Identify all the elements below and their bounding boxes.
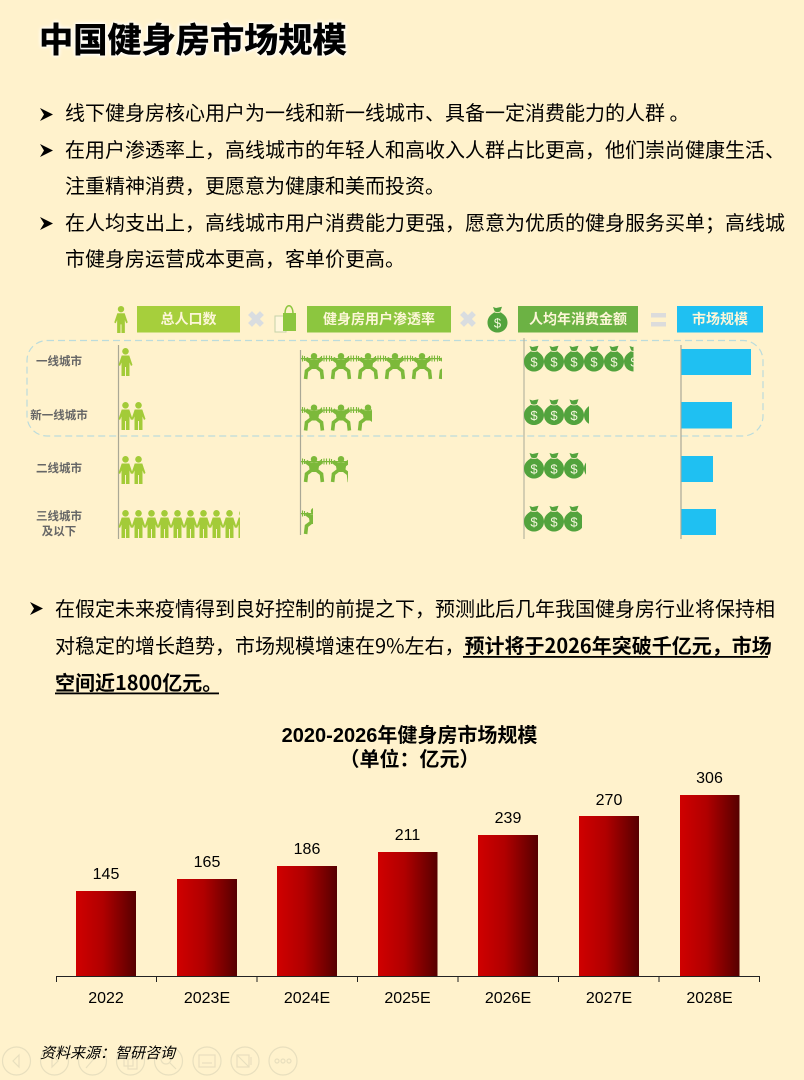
bars <box>76 795 740 976</box>
title: 中国健身房市场规模 <box>39 12 347 62</box>
value labels: 306 <box>696 770 723 787</box>
value labels: 239 <box>495 810 521 827</box>
value labels: 270 <box>596 792 622 809</box>
chart title: 2020-2026年健身房市场规模 <box>282 723 537 747</box>
forecast text: 对稳定的增长趋势，市场规模增速在9%左右，预计将于2026年突破千亿元，市场 <box>55 630 772 659</box>
penetration column <box>300 350 442 535</box>
forecast text: 在假定未来疫情得到良好控制的前提之下，预测此后几年我国健身房行业将保持相 <box>55 593 775 622</box>
city tier labels: 三线城市 <box>36 508 82 524</box>
icon: multiply: ✖ <box>247 307 265 332</box>
x axis <box>56 976 760 982</box>
header: gym user penetration: 健身房用户渗透率 <box>323 309 435 329</box>
header: annual spend per person <box>518 306 638 332</box>
header: gym user penetration <box>307 306 451 332</box>
highlight frame: tier one and new tier one cities <box>27 340 763 436</box>
city tier labels: 及以下 <box>42 523 76 539</box>
source note: 资料来源：智研咨询 <box>40 1042 177 1063</box>
icon: multiply: ✖ <box>459 307 477 332</box>
bullet 2 <box>40 134 785 199</box>
market size formula diagram <box>27 306 763 539</box>
value labels <box>93 770 723 883</box>
axis labels: 2025E <box>384 990 431 1007</box>
spend column <box>524 338 644 539</box>
bullet 2: 注重精神消费，更愿意为健康和美而投资。 <box>65 170 445 199</box>
chart title: （单位：亿元） <box>340 747 480 771</box>
forecast text <box>30 593 775 696</box>
forecast text: 空间近1800亿元。 <box>55 667 222 696</box>
header: market size: 市场规模 <box>692 309 748 329</box>
market size column <box>681 345 751 539</box>
header: total population: 总人口数 <box>160 309 216 329</box>
city tier labels: 一线城市 <box>36 353 82 369</box>
axis labels: 2022 <box>88 990 124 1007</box>
axis labels <box>88 990 733 1007</box>
value labels: 165 <box>194 854 220 871</box>
slideshow navigation controls <box>2 1047 297 1075</box>
bullet 3: 市健身房运营成本更高，客单价更高。 <box>65 243 405 272</box>
icon: equals <box>651 313 666 326</box>
value labels: 186 <box>294 841 320 858</box>
axis labels: 2024E <box>284 990 330 1007</box>
city tier labels <box>30 353 88 539</box>
header: total population <box>137 306 240 332</box>
bar chart: market size 2020-2026 <box>56 723 760 1007</box>
chart title <box>282 723 537 771</box>
icon: money bag <box>488 307 508 332</box>
header: annual spend per person: 人均年消费金额 <box>529 309 627 329</box>
header: market size <box>677 306 763 332</box>
bullet 3: 在人均支出上，高线城市用户消费能力更强，愿意为优质的健身服务买单；高线城 <box>65 207 785 236</box>
bullet 3 <box>40 207 785 272</box>
bullet list: core users <box>40 97 785 272</box>
value labels: 211 <box>395 827 420 844</box>
axis labels: 2028E <box>686 990 733 1007</box>
city tier labels: 新一线城市 <box>30 407 88 423</box>
city tier labels: 二线城市 <box>36 460 82 476</box>
bullet 2: 在用户渗透率上，高线城市的年轻人和高收入人群占比更高，他们崇尚健康生活、 <box>65 134 785 163</box>
axis labels: 2023E <box>184 990 230 1007</box>
bullet 1: 线下健身房核心用户为一线和新一线城市、具备一定消费能力的人群 。 <box>65 97 689 126</box>
population column <box>118 345 250 539</box>
axis labels: 2027E <box>586 990 632 1007</box>
icon: person <box>114 306 128 333</box>
axis labels: 2026E <box>485 990 531 1007</box>
icon: shopping bag <box>275 306 296 332</box>
value labels: 145 <box>93 866 119 883</box>
